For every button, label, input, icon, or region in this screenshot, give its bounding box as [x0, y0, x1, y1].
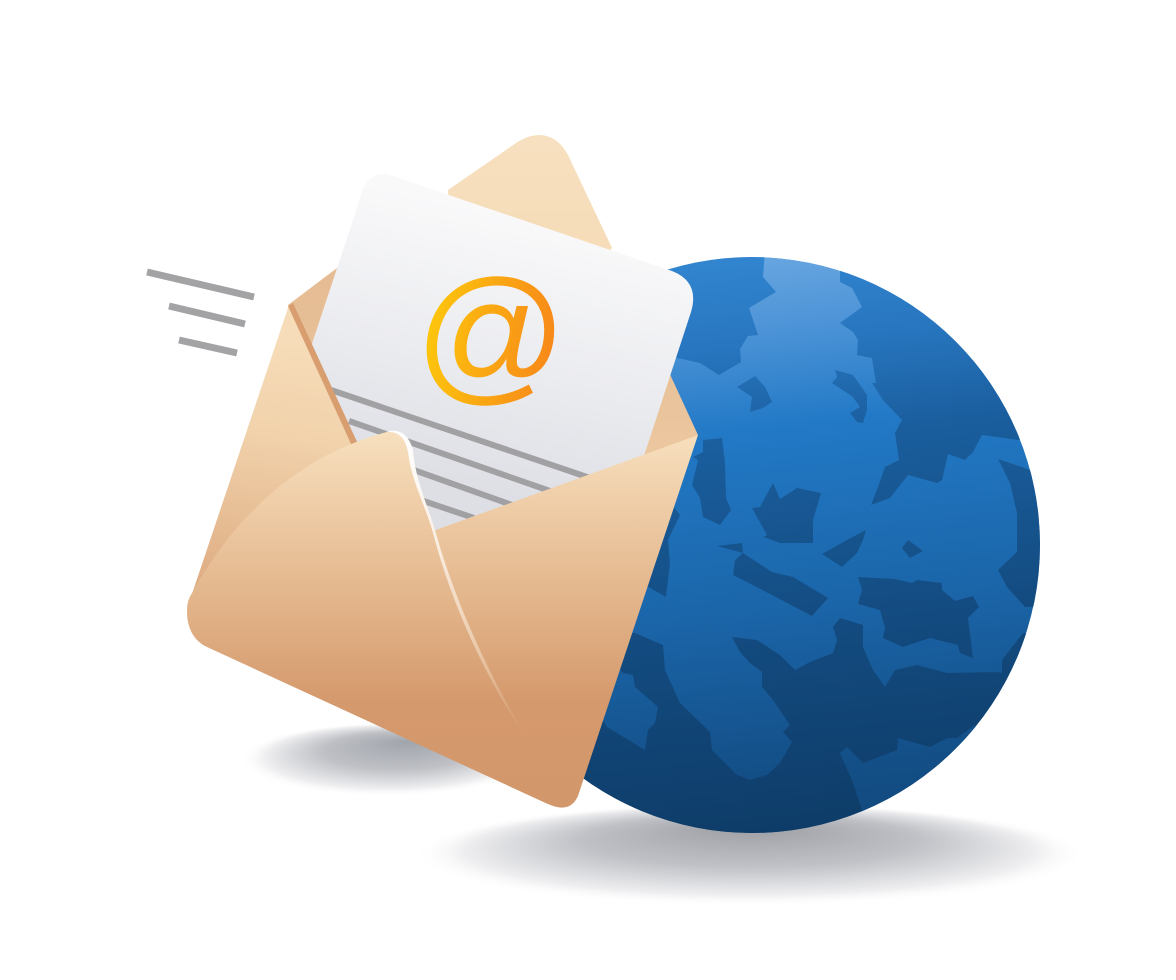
- globe continents: [584, 257, 1040, 833]
- shadow: globe: [414, 803, 1086, 907]
- speed lines: [147, 272, 254, 353]
- icon: globe: [584, 257, 1040, 833]
- flap fold highlight: [386, 431, 533, 748]
- envelope front body: [187, 435, 698, 808]
- paper background: [290, 174, 693, 560]
- icon: envelope: [187, 135, 698, 808]
- globe ocean: [584, 257, 1040, 833]
- globe islands: [603, 670, 976, 811]
- paper sheet: [290, 174, 693, 560]
- paper text lines: [331, 390, 590, 518]
- at sign: @: [415, 249, 567, 417]
- envelope left side flap: [190, 305, 354, 600]
- shadow: envelope: [240, 723, 530, 797]
- envelope interior: [288, 262, 698, 480]
- envelope side flap fold: [288, 303, 358, 446]
- envelope front flap: [187, 431, 548, 804]
- envelope back flap: [448, 135, 612, 300]
